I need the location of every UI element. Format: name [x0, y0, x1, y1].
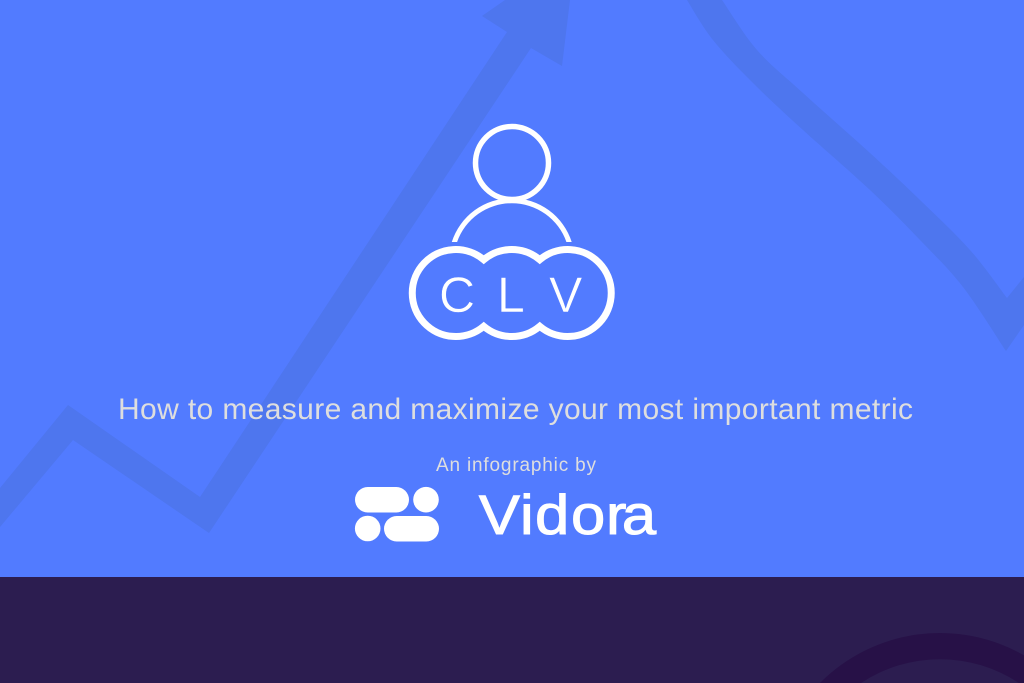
subtitle: How to measure and maximize your most important metric	[118, 393, 913, 426]
icon label: CLV	[439, 267, 583, 323]
icon label: CLV: L	[497, 267, 525, 323]
icon label: CLV: C	[439, 267, 475, 323]
icon: three-lobed cloud	[412, 249, 611, 337]
logo mark: Vidora	[355, 487, 439, 542]
panel: dark footer band	[0, 577, 1024, 683]
icon label: CLV: V	[549, 267, 583, 323]
background chart: rising arrow	[0, 0, 570, 533]
attribution line: An infographic by	[436, 455, 596, 476]
wordmark: Vidora: Vidora	[479, 485, 656, 546]
icon: CLV customer	[412, 126, 611, 337]
icon: customer head	[476, 126, 548, 200]
icon: customer shoulders	[452, 198, 572, 242]
background chart: falling curve	[687, 0, 1024, 351]
background arc in footer	[820, 633, 1024, 683]
